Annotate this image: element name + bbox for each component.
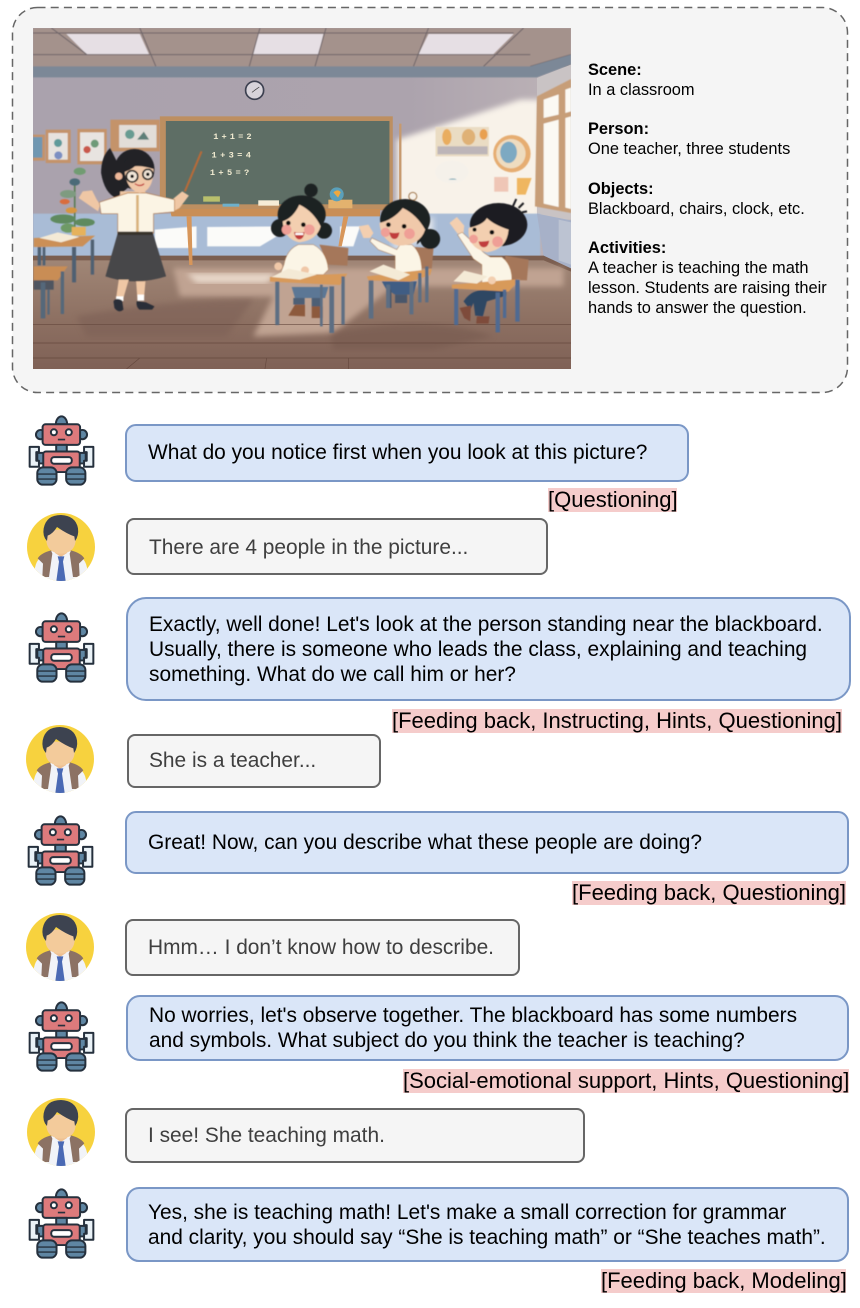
scene description (588, 61, 827, 317)
strategy label 3: [Feeding back, Questioning] (572, 880, 846, 905)
wall pictures (33, 120, 160, 164)
tutor message 2 (126, 597, 851, 701)
plant (50, 168, 95, 236)
student message 1: There are 4 people in the picture... (149, 536, 468, 559)
student two (359, 192, 440, 319)
blackboard (160, 116, 401, 265)
blackboard: 1 + 1 = 2 (213, 132, 252, 142)
strategy label 5: [Feeding back, Modeling] (601, 1268, 847, 1293)
student message 3: Hmm… I don’t know how to describe. (148, 936, 494, 959)
text: objects: Blackboard, chairs, clock, etc. (588, 200, 805, 218)
panel: picture and scene description (12, 6, 848, 394)
student message 3 (125, 919, 520, 976)
strategy label 2: [Feeding back, Instructing, Hints, Questioning] (392, 708, 842, 733)
tutor message 1: What do you notice first when you look at this picture? (148, 441, 647, 464)
text: activities: hands to answer the question. (588, 299, 807, 317)
ceiling (33, 28, 571, 77)
tutor message 4: No worries, let's observe together. The blackboard has some numbers (149, 1004, 797, 1027)
text: objects (588, 180, 805, 218)
tutor message 4: and symbols. What subject do you think the teacher is teaching? (149, 1029, 745, 1052)
text: objects: Objects: (588, 180, 654, 198)
tutor message 2: something. What do we call him or her? (149, 663, 516, 686)
icon: student avatar (26, 725, 94, 793)
tutor message 1 (125, 424, 689, 482)
tutor message 3: Great! Now, can you describe what these people are doing? (148, 831, 702, 854)
student message 4: I see! She teaching math. (148, 1124, 385, 1147)
icon: robot tutor (28, 815, 94, 886)
icon: robot tutor (28, 415, 94, 486)
student three (450, 199, 529, 332)
floor (33, 260, 571, 369)
text: scene: Scene: (588, 61, 642, 79)
left desks (34, 232, 95, 318)
text: person: One teacher, three students (588, 140, 790, 158)
lower wall (33, 214, 540, 256)
text: activities: A teacher is teaching the math (588, 259, 808, 277)
teacher (79, 148, 202, 311)
student message 4 (125, 1108, 585, 1163)
text: person: Person: (588, 120, 649, 138)
text: activities (588, 239, 827, 317)
classroom illustration (33, 28, 571, 369)
tutor message 4 (126, 995, 849, 1061)
icon: student avatar (27, 513, 95, 581)
student message 1 (126, 518, 548, 575)
tutor message 5: and clarity, you should say “She is teaching math” or “She teaches math”. (148, 1226, 826, 1249)
student message 2 (127, 734, 381, 788)
student message 2: She is a teacher... (149, 749, 316, 772)
strategy label 4: [Social-emotional support, Hints, Questioning] (403, 1068, 849, 1093)
text: activities: lesson. Students are raising their (588, 279, 827, 297)
tutor message 3 (125, 811, 849, 874)
student one (270, 184, 348, 333)
tutor message 5 (126, 1187, 849, 1262)
text: person (588, 120, 790, 158)
icon: student avatar (26, 913, 94, 981)
blackboard: 1 + 3 = 4 (212, 150, 251, 160)
tutor message 5: Yes, she is teaching math! Let's make a small correction for grammar (148, 1201, 786, 1224)
lit wall (397, 65, 571, 220)
icon: robot tutor (28, 1001, 94, 1072)
blackboard: 1 + 5 = ? (210, 168, 249, 178)
tutor message 2: Exactly, well done! Let's look at the person standing near the blackboard. (149, 613, 823, 636)
icon: robot tutor (28, 612, 94, 683)
icon: student avatar (27, 1098, 95, 1166)
right wall posters (435, 127, 532, 195)
window (535, 79, 571, 213)
text: activities: Activities: (588, 239, 666, 257)
clock (246, 81, 264, 99)
icon: robot tutor (28, 1188, 94, 1259)
strategy label 1: [Questioning] (548, 487, 678, 512)
tutor message 2: Usually, there is someone who leads the class, explaining and teaching (149, 638, 807, 661)
text: scene: In a classroom (588, 81, 695, 99)
text: scene (588, 61, 695, 99)
